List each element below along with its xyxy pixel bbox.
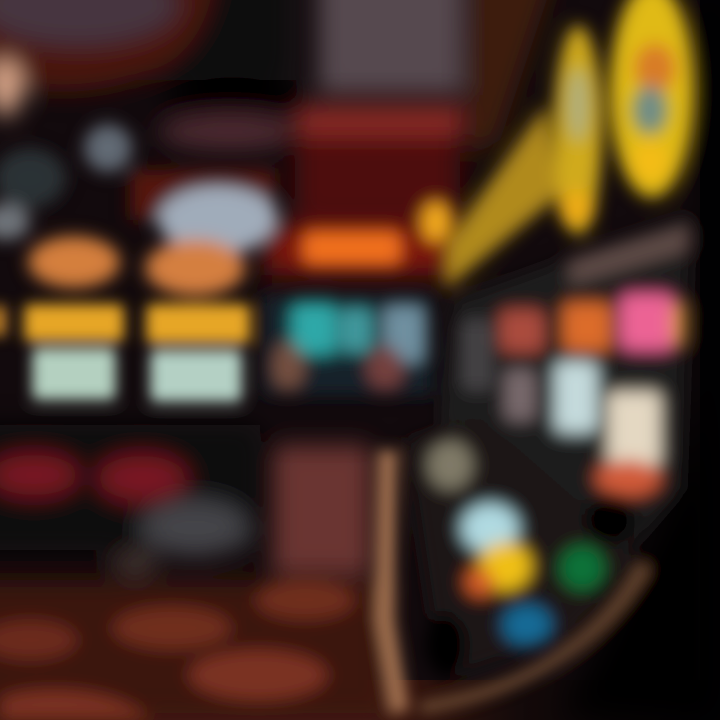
- back wall red: [265, 105, 465, 275]
- orange sign: [302, 200, 453, 266]
- pale screens: [32, 348, 242, 402]
- ceiling: [0, 0, 560, 160]
- center screen: [262, 295, 432, 395]
- right machines: [440, 215, 690, 560]
- yellow bars: [0, 304, 250, 344]
- left machines: [0, 124, 278, 402]
- lower console: [385, 420, 645, 712]
- rail: [385, 450, 645, 712]
- yellow signs: [445, 0, 694, 290]
- stools: [0, 425, 260, 579]
- right dark edge: [560, 0, 720, 720]
- floor: [0, 445, 390, 720]
